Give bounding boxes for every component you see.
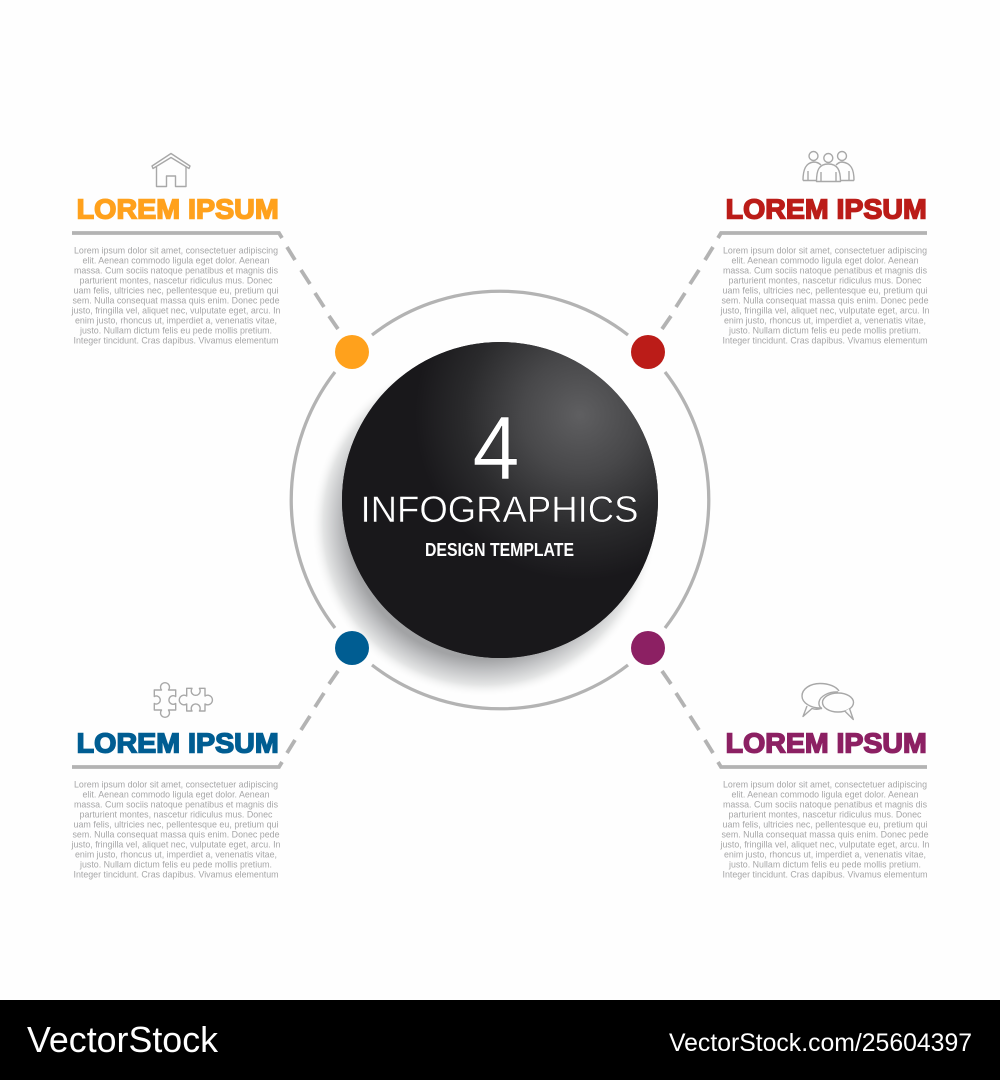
heading: top right: LOREM IPSUM <box>726 194 927 224</box>
connector: top left <box>72 233 338 329</box>
body text: top right: parturient montes, nascetur ridiculus mus. Donec <box>728 275 922 285</box>
body text: bottom left: uam felis, ultricies nec, pellentesque eu, pretium qui <box>74 819 278 829</box>
body text: top right: Lorem ipsum dolor sit amet, consectetuer adipiscing <box>723 245 927 255</box>
icon: speech bubbles <box>802 684 854 720</box>
body text: bottom left: Integer tincidunt. Cras dapibus. Vivamus elementum <box>74 869 279 879</box>
footer bar <box>0 1000 1000 1080</box>
body text: top right: Integer tincidunt. Cras dapibus. Vivamus elementum <box>722 335 928 345</box>
central title: 4 <box>472 399 520 499</box>
body text: bottom left <box>71 779 280 879</box>
body text: top left: enim justo, rhoncus ut, imperdiet a, venenatis vitae, <box>75 315 277 325</box>
central title: INFOGRAPHICS <box>360 488 638 530</box>
body text: bottom left: elit. Aenean commodo ligula eget dolor. Aenean <box>82 789 270 799</box>
body text: bottom left: sem. Nulla consequat massa quis enim. Donec pede <box>72 829 280 839</box>
icon: puzzle pieces <box>154 683 212 717</box>
body text: bottom right: justo. Nullam dictum felis eu pede mollis pretium. <box>728 859 921 869</box>
body text: bottom right <box>720 779 930 879</box>
body text: bottom right: justo, fringilla vel, aliquet nec, vulputate eget, arcu. In <box>720 839 930 849</box>
body text: top right: justo. Nullam dictum felis eu pede mollis pretium. <box>728 325 921 335</box>
body text: top right: elit. Aenean commodo ligula eget dolor. Aenean <box>732 255 918 265</box>
heading: bottom right: LOREM IPSUM <box>726 728 927 758</box>
node dot: blue <box>335 631 369 665</box>
connector: bottom left <box>72 671 338 767</box>
body text: bottom left: enim justo, rhoncus ut, imperdiet a, venenatis vitae, <box>75 849 277 859</box>
footer bar: VectorStock <box>27 1019 219 1060</box>
body text: top left: massa. Cum sociis natoque penatibus et magnis dis <box>74 265 278 275</box>
icon: house <box>152 154 190 186</box>
connector: bottom right <box>662 671 927 767</box>
body text: bottom right: uam felis, ultricies nec, pellentesque eu, pretium qui <box>722 819 928 829</box>
body text: top left: sem. Nulla consequat massa quis enim. Donec pede <box>72 295 280 305</box>
body text: bottom left: massa. Cum sociis natoque penatibus et magnis dis <box>74 799 278 809</box>
central black sphere <box>342 342 658 658</box>
central title <box>360 399 638 560</box>
body text: bottom right: enim justo, rhoncus ut, imperdiet a, venenatis vitae, <box>724 849 926 859</box>
body text: top left: Lorem ipsum dolor sit amet, consectetuer adipiscing <box>74 245 278 255</box>
body text: top left <box>71 245 280 345</box>
node dot: purple <box>631 631 665 665</box>
sphere drop shadow <box>311 351 657 697</box>
body text: top right: sem. Nulla consequat massa quis enim. Donec pede <box>722 295 928 305</box>
heading: top left: LOREM IPSUM <box>77 194 279 224</box>
body text: bottom left: parturient montes, nascetur ridiculus mus. Donec <box>80 809 273 819</box>
body text: top left: justo. Nullam dictum felis eu pede mollis pretium. <box>79 325 272 335</box>
node dot: orange <box>335 335 369 369</box>
body text: top right: massa. Cum sociis natoque penatibus et magnis dis <box>723 265 927 275</box>
body text: bottom right: parturient montes, nascetur ridiculus mus. Donec <box>728 809 922 819</box>
body text: top left: uam felis, ultricies nec, pellentesque eu, pretium qui <box>74 285 278 295</box>
heading: bottom left: LOREM IPSUM <box>77 728 279 758</box>
body text: top left: justo, fringilla vel, aliquet nec, vulputate eget, arcu. In <box>71 305 280 315</box>
body text: bottom right: elit. Aenean commodo ligula eget dolor. Aenean <box>732 789 918 799</box>
body text: top right: justo, fringilla vel, aliquet nec, vulputate eget, arcu. In <box>720 305 930 315</box>
connector: top right <box>662 233 927 329</box>
body text: bottom right: Lorem ipsum dolor sit amet, consectetuer adipiscing <box>723 779 927 789</box>
body text: bottom left: justo, fringilla vel, aliquet nec, vulputate eget, arcu. In <box>71 839 280 849</box>
body text: top right: enim justo, rhoncus ut, imperdiet a, venenatis vitae, <box>724 315 926 325</box>
body text: top left: Integer tincidunt. Cras dapibus. Vivamus elementum <box>74 335 279 345</box>
central title: DESIGN TEMPLATE <box>425 540 574 560</box>
footer bar: VectorStock.com/25604397 <box>669 1029 972 1057</box>
body text: bottom left: justo. Nullam dictum felis eu pede mollis pretium. <box>79 859 272 869</box>
body text: top left: elit. Aenean commodo ligula eget dolor. Aenean <box>82 255 270 265</box>
body text: bottom right: massa. Cum sociis natoque penatibus et magnis dis <box>723 799 927 809</box>
outer ring arcs <box>291 291 709 709</box>
body text: bottom left: Lorem ipsum dolor sit amet, consectetuer adipiscing <box>74 779 278 789</box>
body text: bottom right: sem. Nulla consequat massa quis enim. Donec pede <box>722 829 928 839</box>
icon: people <box>803 152 854 182</box>
body text: top left: parturient montes, nascetur ridiculus mus. Donec <box>80 275 273 285</box>
body text: top right <box>720 245 930 345</box>
node dot: red <box>631 335 665 369</box>
body text: top right: uam felis, ultricies nec, pellentesque eu, pretium qui <box>722 285 928 295</box>
body text: bottom right: Integer tincidunt. Cras dapibus. Vivamus elementum <box>722 869 928 879</box>
